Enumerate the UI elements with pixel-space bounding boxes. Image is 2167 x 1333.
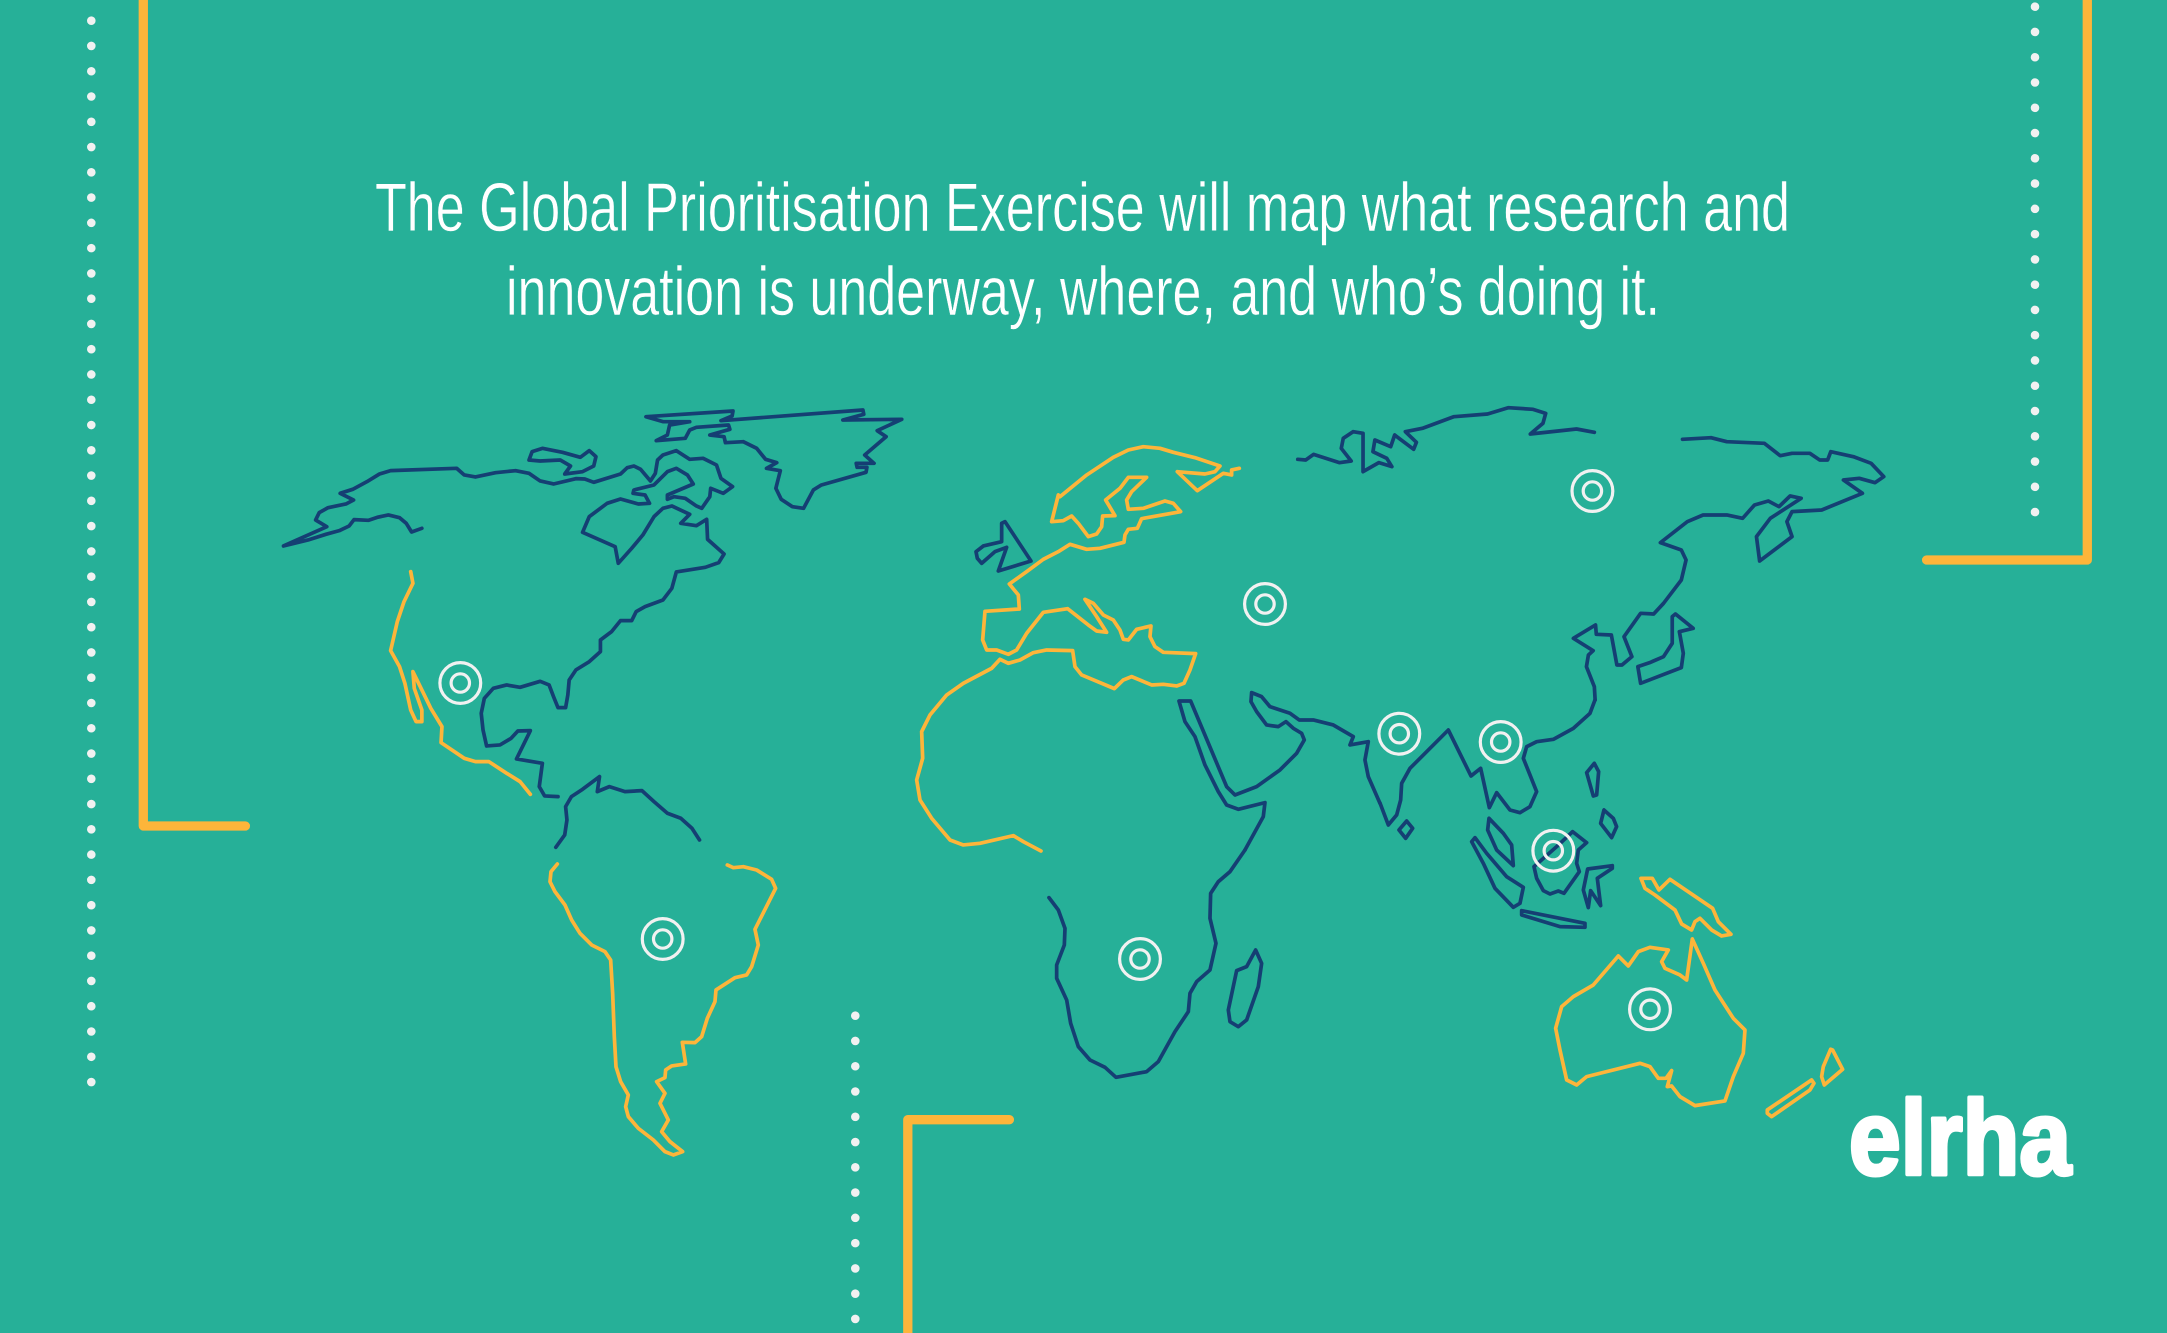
bracket: left bbox=[143, 0, 245, 826]
world map bbox=[283, 408, 1884, 1155]
marker: South America bbox=[642, 919, 683, 959]
dotted line: top right bbox=[2031, 7, 2039, 514]
marker: Indonesia bbox=[1533, 830, 1574, 871]
map: North America west coast bbox=[391, 572, 530, 794]
marker: Australia bbox=[1630, 989, 1670, 1030]
dotted line: left bbox=[87, 21, 96, 1084]
marker: Central Asia bbox=[1245, 584, 1285, 624]
marker: Southern Africa bbox=[1120, 939, 1160, 979]
title: innovation is underway, where, and who’s doing it. bbox=[506, 253, 1660, 330]
dotted line: bottom centre bbox=[851, 1016, 860, 1320]
marker: India bbox=[1379, 713, 1420, 754]
bracket: top right bbox=[1927, 0, 2087, 560]
map: Southern Africa and Madagascar bbox=[1049, 850, 1262, 1077]
map: South and South East Asia bbox=[1380, 700, 1617, 927]
map: South America bbox=[550, 864, 776, 1155]
logo: elrha: elrha bbox=[1849, 1080, 2072, 1198]
map: North America coast and Canada bbox=[283, 410, 902, 847]
marker: South East Asia bbox=[1480, 722, 1521, 762]
marker: North America bbox=[440, 663, 481, 703]
bracket: bottom centre bbox=[908, 1120, 1009, 1333]
map: Russia and East Asia bbox=[1298, 408, 1884, 700]
map: Australia, New Guinea, New Zealand bbox=[1556, 878, 1843, 1117]
marker: Siberia bbox=[1572, 471, 1613, 511]
map: Europe and North Africa bbox=[917, 447, 1239, 851]
map: Britain, Red Sea, Arabia bbox=[976, 522, 1380, 850]
